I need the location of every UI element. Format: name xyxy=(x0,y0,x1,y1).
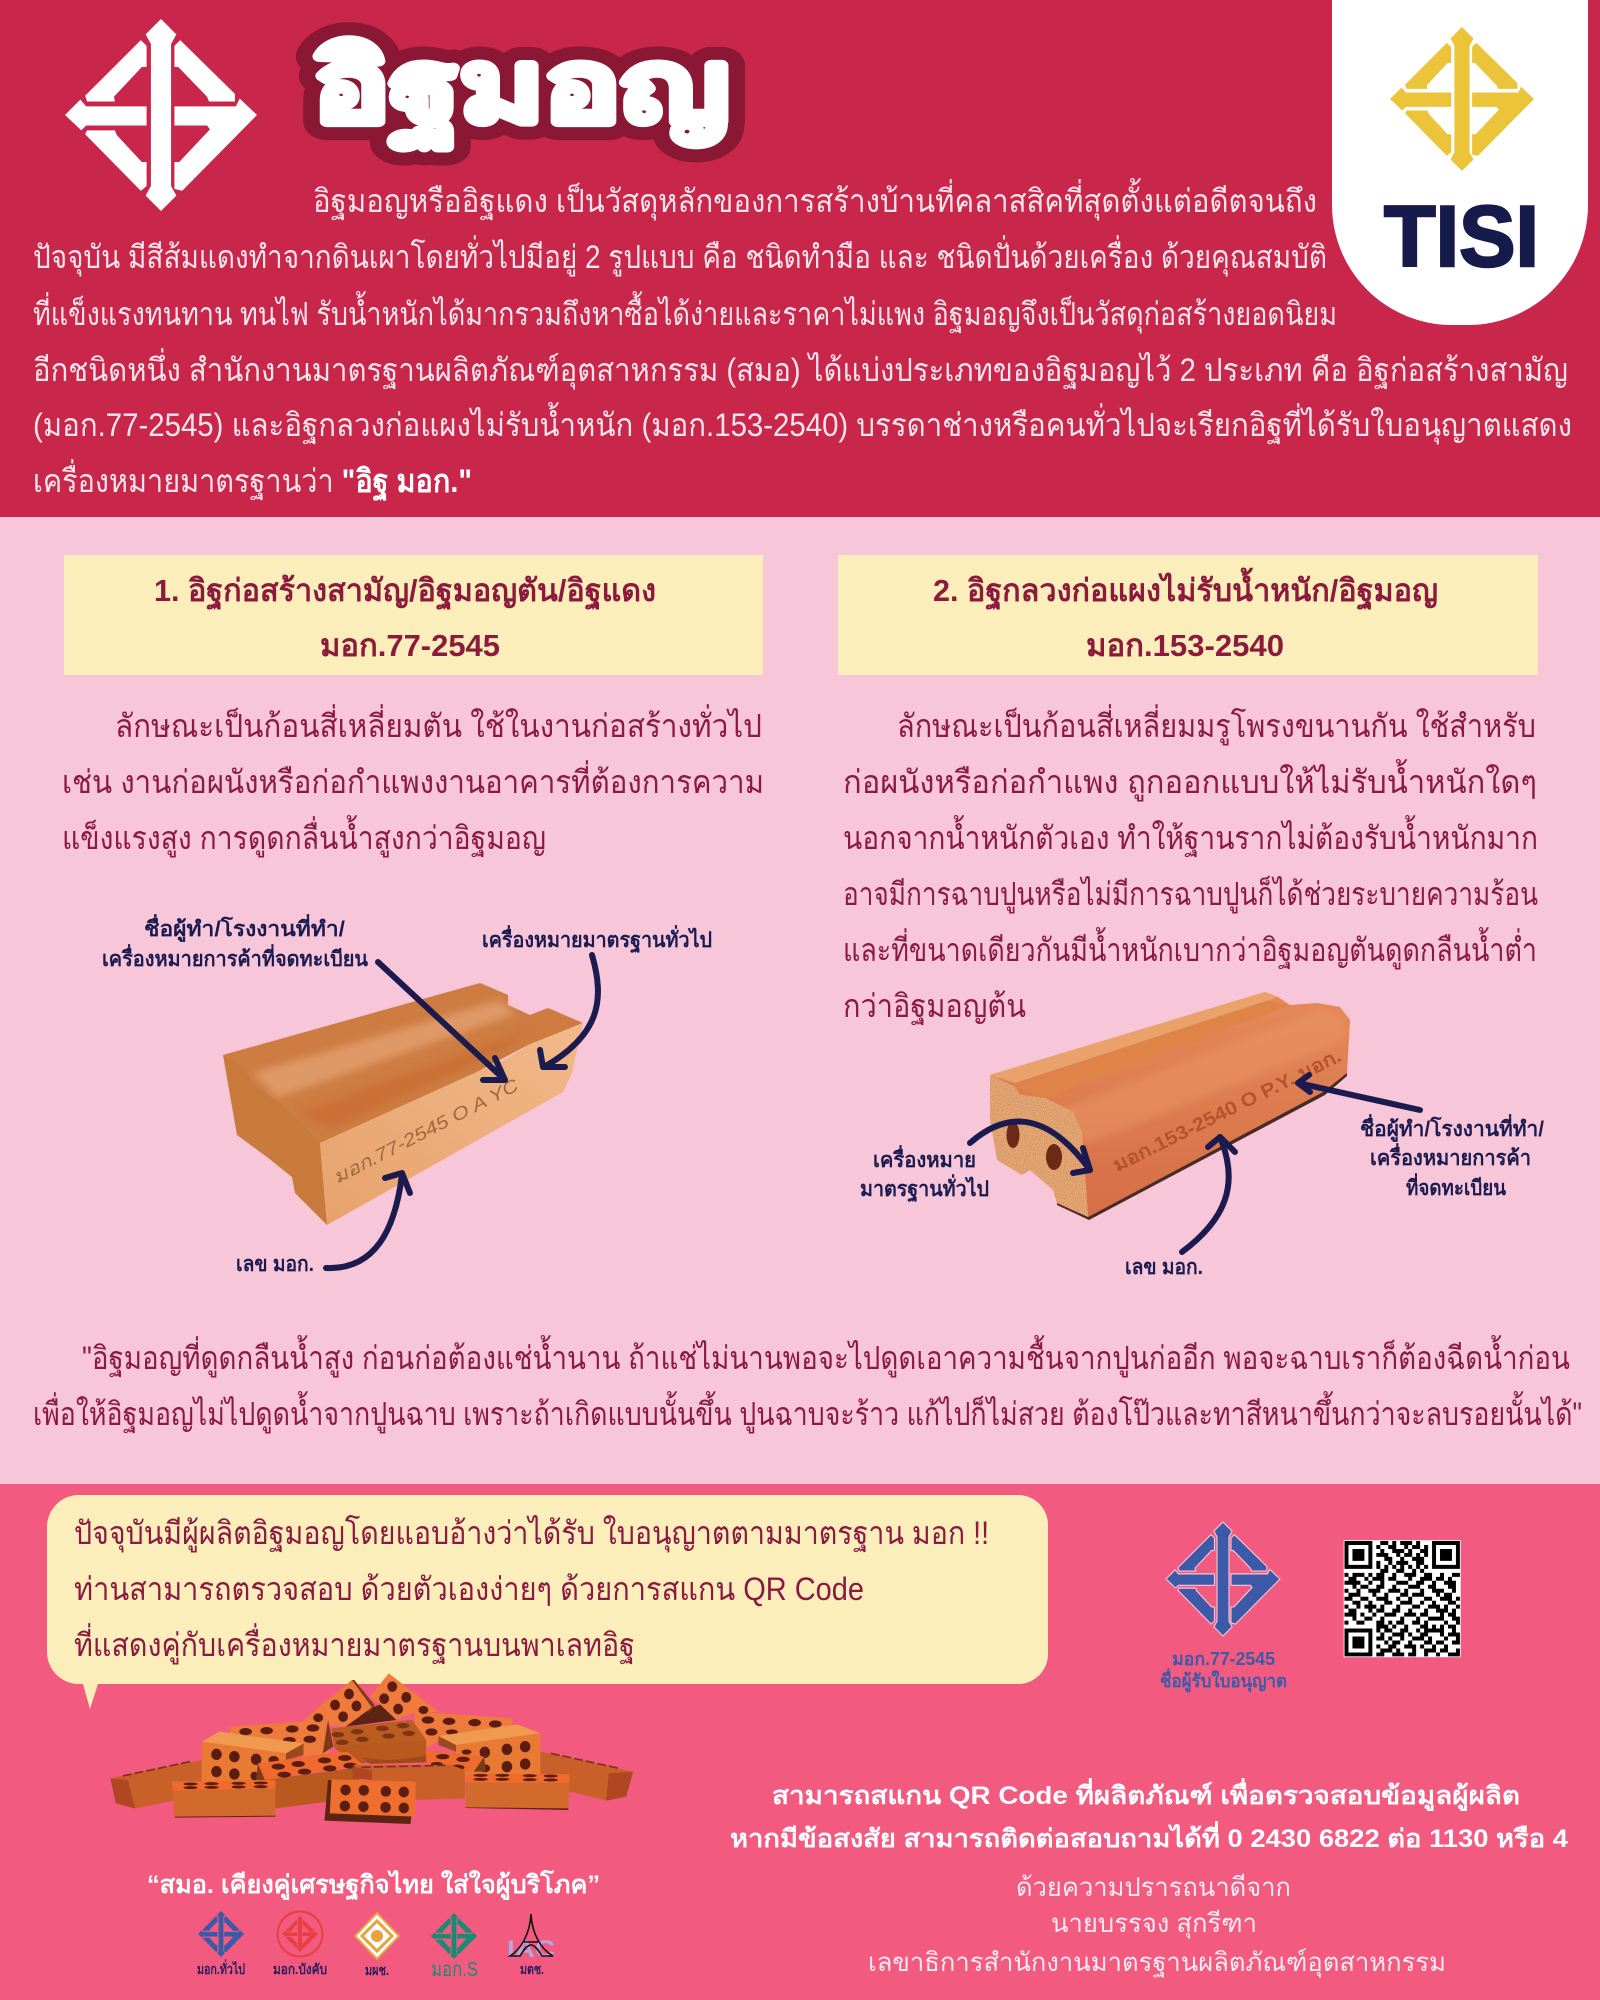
label: maker name right: ที่จดทะเบียน xyxy=(1406,1172,1507,1200)
icon: national standard mark xyxy=(507,1914,555,1977)
text block: introduction: ปัจจุบัน มีสีส้มแดงทำจากดินเผาโดยทั่วไปมีอยู่ 2 รูปแบบ คือ ชนิดทำมือ และ ชนิดปั่นด้วยเครื่อง ด้วยคุณสมบัติ xyxy=(33,235,1327,277)
text block: type 2 description: ลักษณะเป็นก้อนสี่เหลี่ยมมรูโพรงขนานกัน ใช้สำหรับ xyxy=(897,704,1536,746)
panel: TISI logo badge xyxy=(1332,0,1588,325)
brick imprint: มอก.153-2540 O P.Y. มอก. xyxy=(1110,1046,1345,1176)
photo: hollow brick xyxy=(990,992,1350,1220)
text block: type 1 description xyxy=(62,704,764,858)
title: อิฐมอญ xyxy=(313,31,729,152)
text block: signature: เลขาธิการสำนักงานมาตรฐานผลิตภัณฑ์อุตสาหกรรม xyxy=(868,1947,1446,1978)
QR code xyxy=(1344,1540,1461,1657)
callout: warning speech bubble: ท่านสามารถตรวจสอบ ด้วยตัวเองง่ายๆ ด้วยการสแกน QR Code xyxy=(74,1571,864,1607)
icon: general standard mark: มอก.ทั่วไป xyxy=(197,1959,245,1977)
icon: yellow TISI emblem xyxy=(1390,27,1534,171)
text block: type 1 description: เช่น งานก่อผนังหรือก่อกำแพงงานอาคารที่ต้องการความ xyxy=(62,760,764,800)
label: maker name right: ชื่อผู้ทำ/โรงงานที่ทำ/ xyxy=(1360,1113,1544,1143)
text block: type 1 description: แข็งแรงสูง การดูดกลื่นน้ำสูงกว่าอิฐมอญ xyxy=(62,815,546,858)
label: TIS number left: เลข มอก. xyxy=(236,1253,314,1276)
callout: warning speech bubble xyxy=(47,1495,1048,1709)
text block: type 2 description xyxy=(843,704,1538,1026)
arrow: right brick standard mark xyxy=(970,1122,1090,1173)
label: maker name right: เครื่องหมายการค้า xyxy=(1370,1142,1531,1170)
label: maker name left xyxy=(102,913,369,971)
icon: community product mark xyxy=(355,1913,399,1978)
text block: signature: นายบรรจง สุกรีฑา xyxy=(1051,1908,1257,1939)
label: maker name left: ชื่อผู้ทำ/โรงงานที่ทำ/ xyxy=(144,913,345,943)
icon: national standard mark: IAC xyxy=(507,1936,555,1963)
icon: blue standard mark with licensee text: มอก.77-2545 xyxy=(1172,1649,1275,1669)
text block: signature xyxy=(868,1872,1446,1978)
label: standard mark left: เครื่องหมายมาตรฐานทั่วไป xyxy=(482,924,712,954)
text block: introduction: อิฐมอญหรืออิฐแดง เป็นวัสดุหลักของการสร้างบ้านที่คลาสสิคที่สุดตั้งแต่อดีตจนถึง xyxy=(313,178,1317,221)
panel: heading type 2: มอก.153-2540 xyxy=(1086,628,1284,663)
icon: TIS S mark: มอก.S xyxy=(431,1959,478,1981)
label: maker name right xyxy=(1360,1113,1544,1200)
panel: heading type 1 xyxy=(64,555,763,675)
text block: type 2 description: กว่าอิฐมอญต้น xyxy=(843,988,1026,1026)
callout: warning speech bubble: ที่แสดงคู่กับเครื่องหมายมาตรฐานบนพาเลทอิฐ xyxy=(74,1623,635,1665)
icon: TIS S mark xyxy=(431,1913,478,1981)
panel: bottom rose section xyxy=(0,1484,1600,2000)
icon: community product mark: มผช. xyxy=(365,1962,389,1978)
text block: quote xyxy=(33,1335,1582,1434)
text block: introduction: ที่แข็งแรงทนทาน ทนไฟ รับน้ำหนักได้มากรวมถึงหาซื้อได้ง่ายและราคาไม่แพง อิฐมอญจึงเป็นวัสดุก่อสร้างยอดนิยม xyxy=(33,291,1337,334)
text block: introduction xyxy=(33,178,1572,502)
slogan: “สมอ. เคียงคู่เศรษฐกิจไทย ใส่ใจผู้บริโภค” xyxy=(147,1869,600,1901)
callout: warning speech bubble: ปัจจุบันมีผู้ผลิตอิฐมอญโดยแอบอ้างว่าได้รับ ใบอนุญาตตามมาตรฐาน มอก !! xyxy=(74,1515,989,1553)
brick imprint: มอก.77-2545 O A YC xyxy=(330,1074,523,1188)
text block: QR instructions xyxy=(730,1778,1568,1853)
label: TIS number right: เลข มอก. xyxy=(1125,1256,1203,1279)
label: maker name left: เครื่องหมายการค้าที่จดทะเบียน xyxy=(102,943,369,971)
photo: solid brick xyxy=(223,983,583,1225)
arrow: left brick TIS number xyxy=(326,1173,410,1268)
icon: national standard mark: มตช. xyxy=(520,1961,544,1977)
text block: introduction: เครื่องหมายมาตรฐานว่า "อิฐ มอก." xyxy=(33,459,472,502)
icon: general standard mark xyxy=(197,1911,245,1977)
logo wordmark: TISI xyxy=(1384,189,1539,285)
label: standard mark right: มาตรฐานทั่วไป xyxy=(860,1173,989,1203)
label: standard mark right: เครื่องหมาย xyxy=(873,1144,976,1172)
text block: type 1 description: ลักษณะเป็นก้อนสี่เหลี่ยมตัน ใช้ในงานก่อสร้างทั่วไป xyxy=(115,704,762,744)
panel: heading type 1: มอก.77-2545 xyxy=(320,628,500,663)
panel: heading type 2: 2. อิฐกลวงก่อแผงไม่รับน้ำหนัก/อิฐมอญ xyxy=(933,567,1438,611)
icon: mandatory standard mark: มอก.บังคับ xyxy=(273,1961,327,1977)
arrow: left brick maker mark xyxy=(378,962,505,1080)
text block: QR instructions: หากมีข้อสงสัย สามารถติดต่อสอบถามได้ที่ 0 2430 6822 ต่อ 1130 หรือ 4 xyxy=(730,1821,1568,1853)
icon: blue standard mark with licensee text: ชื่อผู้รับใบอนุญาต xyxy=(1160,1668,1287,1693)
illustration: brick pile xyxy=(111,1673,633,1824)
text block: type 2 description: ก่อผนังหรือก่อกำแพง ถูกออกแบบให้ไม่รับน้ำหนักใดๆ xyxy=(843,759,1537,802)
icon: blue standard mark with licensee text xyxy=(1160,1522,1287,1693)
title: อิฐมอญ xyxy=(313,31,729,152)
label: standard mark right xyxy=(860,1144,989,1203)
text block: signature: ด้วยความปรารถนาดีจาก xyxy=(1016,1872,1291,1902)
icon: mandatory standard mark xyxy=(273,1912,327,1977)
arrow: right brick TIS number xyxy=(1182,1137,1235,1252)
panel: heading type 2 xyxy=(838,555,1538,675)
icon: white TISI emblem xyxy=(65,19,257,211)
panel: pink middle section xyxy=(0,517,1600,1484)
arrow: left brick standard mark xyxy=(540,955,598,1067)
panel: top red header band xyxy=(0,0,1600,517)
text block: QR instructions: สามารถสแกน QR Code ที่ผลิตภัณฑ์ เพื่อตรวจสอบข้อมูลผู้ผลิต xyxy=(772,1778,1520,1812)
panel: heading type 1: 1. อิฐก่อสร้างสามัญ/อิฐมอญตัน/อิฐแดง xyxy=(154,573,656,611)
arrow: right brick maker mark xyxy=(1298,1075,1420,1110)
